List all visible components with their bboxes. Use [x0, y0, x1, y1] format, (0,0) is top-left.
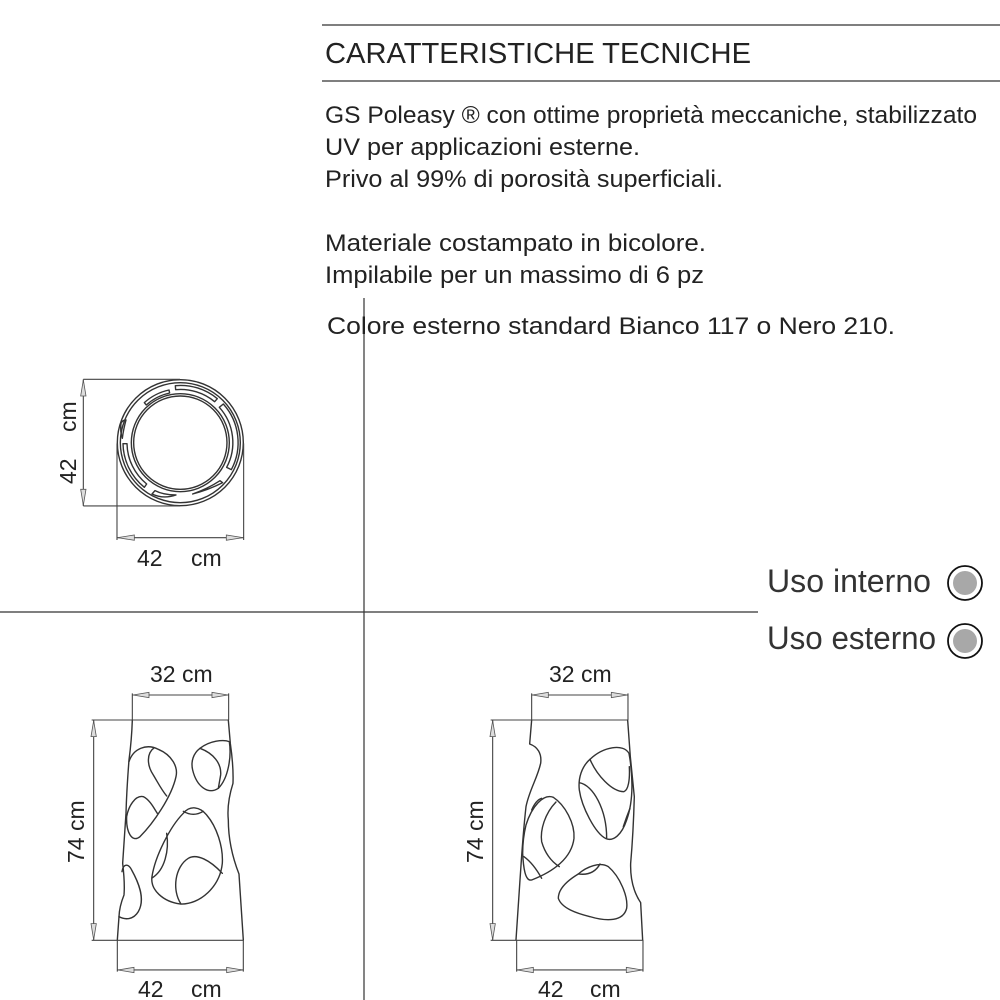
- top view drawing: cm: [191, 545, 222, 571]
- top view drawing: cm: [55, 401, 81, 432]
- heading: caratteristiche tecniche: CARATTERISTICHE TECNICHE: [325, 38, 751, 70]
- text block: material description: [325, 102, 977, 340]
- front view drawing B: 74 cm: [462, 800, 488, 863]
- front view drawing A: 74 cm: [63, 800, 89, 863]
- top view drawing: [55, 379, 244, 571]
- top view drawing: 42: [137, 545, 163, 571]
- text block: material description: UV per applicazioni esterne.: [325, 134, 640, 161]
- text block: material description: Materiale costampato in bicolore.: [325, 230, 706, 257]
- top view drawing: 42: [55, 458, 81, 484]
- text block: material description: Impilabile per un massimo di 6 pz: [325, 262, 704, 289]
- legend: uso esterno: Uso esterno: [767, 620, 936, 656]
- front view drawing A: [63, 661, 243, 1000]
- text block: material description: Colore esterno standard Bianco 117 o Nero 210.: [327, 313, 895, 340]
- legend: uso interno: Uso interno: [767, 563, 931, 599]
- front view drawing A: 32 cm: [150, 661, 213, 687]
- text block: material description: Privo al 99% di porosità superficiali.: [325, 166, 723, 193]
- front view drawing B: [462, 661, 643, 1000]
- front view drawing B: 32 cm: [549, 661, 612, 687]
- text block: material description: GS Poleasy ® con ottime proprietà meccaniche, stabilizzato: [325, 102, 977, 129]
